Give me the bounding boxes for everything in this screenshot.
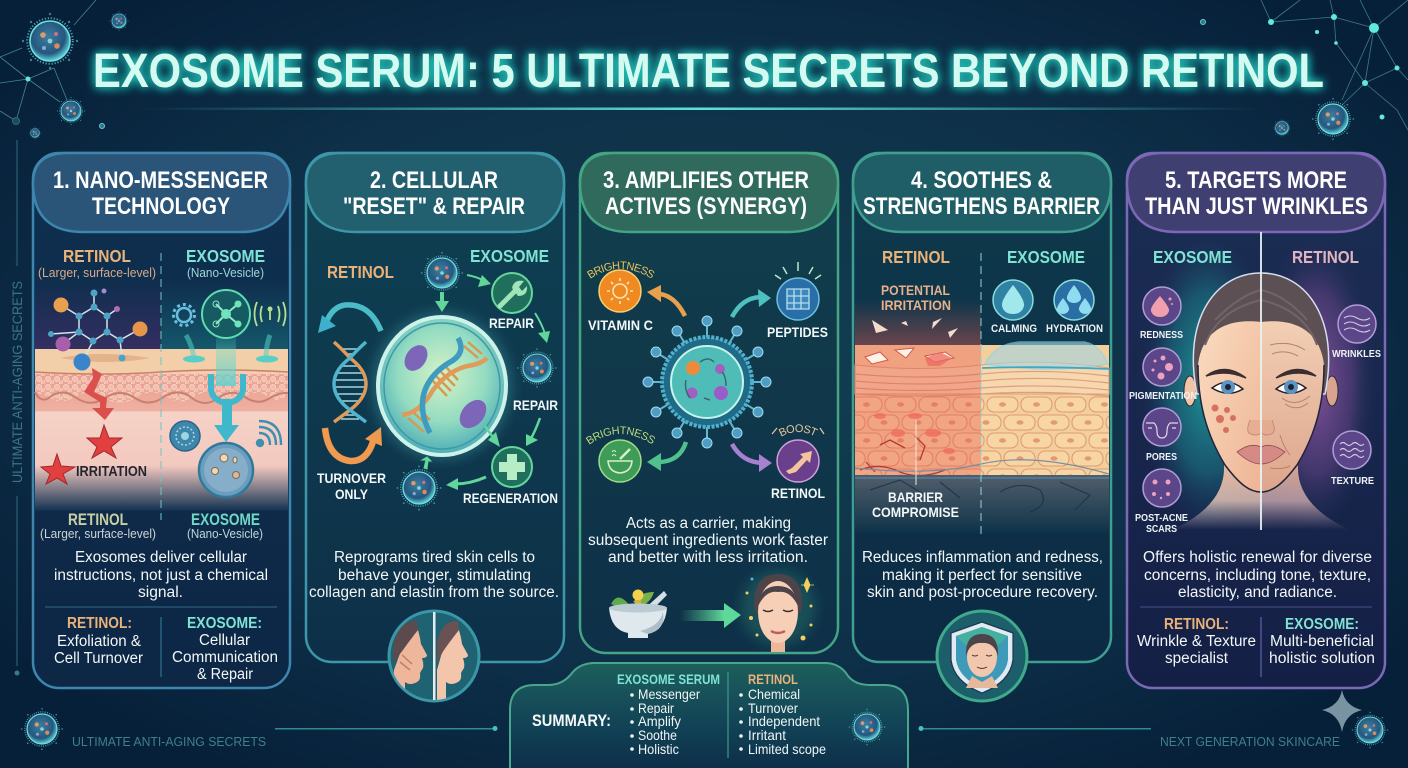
- comparison: retinol: [54, 615, 143, 667]
- label: turnover only: ONLY: [335, 486, 369, 502]
- heading 5: 5. TARGETS MORE: [1165, 167, 1347, 194]
- comparison: exosome: Communication: [172, 649, 278, 666]
- panel 3: amplifies other actives: [578, 152, 840, 654]
- label: redness: REDNESS: [1140, 329, 1183, 341]
- sub-labels: exosome: EXOSOME: [191, 511, 260, 529]
- arrow: repair flow 2: [526, 418, 540, 446]
- icon: exosome top: [421, 252, 463, 294]
- arrow: exosome delivery: [211, 338, 243, 442]
- icon: retinol boost: [772, 424, 824, 483]
- arrow: to vitamin c: [647, 285, 685, 316]
- label: retinol: RETINOL: [327, 262, 394, 282]
- description 5: elasticity, and radiance.: [1178, 584, 1337, 601]
- label: retinol: RETINOL: [1292, 247, 1359, 267]
- comparison: exosome: EXOSOME:: [1285, 616, 1359, 633]
- arrow: repair flow 1: [535, 313, 550, 343]
- column labels: retinol: (Larger, surface-level): [38, 266, 156, 280]
- description 2: [309, 549, 559, 601]
- label: barrier compromise: COMPROMISE: [872, 504, 959, 520]
- comparison: retinol: RETINOL:: [1164, 616, 1229, 633]
- description 5: concerns, including tone, texture,: [1144, 567, 1371, 584]
- list: exosome serum: Repair: [638, 700, 674, 716]
- label: repair 2: REPAIR: [513, 397, 558, 413]
- comparison: exosome: Cellular: [199, 632, 250, 649]
- comparison: retinol: Exfoliation &: [57, 633, 142, 650]
- icon: small exosome right: [1273, 119, 1291, 137]
- sub-labels: retinol: RETINOL: [68, 511, 128, 529]
- label: irritation: IRRITATION: [76, 464, 147, 480]
- comparison: exosome: Multi-beneficial: [1270, 633, 1374, 650]
- label: exosome: EXOSOME: [1153, 247, 1232, 267]
- footer right: [918, 690, 1388, 749]
- icon: large exosome: [22, 13, 78, 69]
- icon: botanical mortar: BRIGHTNESS: [586, 426, 655, 444]
- sub-labels: retinol: [40, 511, 156, 541]
- icon: retinol dna: [334, 342, 366, 422]
- network decoration: top right: [1200, 0, 1408, 140]
- icon: summary exosome: [849, 709, 885, 745]
- list: exosome serum: Amplify: [638, 713, 681, 729]
- icon: vitamin c sun: BRIGHTNESS: [587, 261, 654, 278]
- comparison: retinol: Cell Turnover: [54, 650, 143, 667]
- arrow: cell to regeneration: [485, 426, 500, 447]
- label: post-acne scars: SCARS: [1146, 523, 1177, 535]
- description 5: [1143, 549, 1372, 601]
- description 2: behave younger, stimulating: [338, 567, 531, 584]
- illustration: split face: [1172, 273, 1350, 530]
- comparison: exosome: [1269, 616, 1375, 667]
- icon: wrench repair: [492, 273, 532, 313]
- label: turnover only: TURNOVER: [317, 470, 386, 486]
- icon: pores: [1143, 408, 1181, 446]
- heading 3: 3. AMPLIFIES OTHER: [603, 167, 809, 194]
- icon: redness: [1143, 287, 1181, 325]
- list: retinol: RETINOL: [748, 671, 798, 687]
- footer left: [21, 708, 497, 750]
- description 2: Reprograms tired skin cells to: [334, 549, 535, 566]
- column labels: exosome: [186, 246, 265, 280]
- list: exosome serum: Messenger: [638, 686, 700, 702]
- footer right: NEXT GENERATION SKINCARE: [1160, 735, 1340, 749]
- heading 4: 4. SOOTHES &: [911, 167, 1052, 194]
- heading 1: 1. NANO-MESSENGER: [53, 167, 268, 194]
- sub-labels: exosome: [187, 511, 263, 541]
- comparison: exosome: & Repair: [197, 666, 253, 683]
- summary panel: [510, 663, 908, 768]
- label: exosome: EXOSOME: [470, 246, 549, 266]
- panel 4: soothes and strengthens barrier: [853, 153, 1111, 701]
- icon: small exosome top: [109, 11, 129, 31]
- description 4: Reduces inflammation and redness,: [862, 549, 1103, 566]
- description 1: signal.: [138, 584, 183, 601]
- icon: medium exosome: [57, 97, 85, 125]
- icon: botanical mortar: [586, 426, 655, 483]
- heading 5: [1127, 153, 1385, 232]
- panel 2: cellular reset and repair: [306, 153, 564, 702]
- label: calming: CALMING: [991, 323, 1037, 335]
- label: potential irritation: POTENTIAL: [881, 282, 950, 298]
- arrow: exosome back to cell: [422, 457, 431, 469]
- icon: exosome repair: [517, 348, 557, 388]
- list: retinol: [739, 671, 826, 757]
- vertical side label: [10, 140, 25, 676]
- label: summary: SUMMARY:: [532, 711, 611, 730]
- list: retinol: Limited scope: [748, 741, 826, 757]
- icon: before and after profile faces: [388, 610, 479, 702]
- label: exosome: EXOSOME: [1007, 247, 1085, 267]
- icon: exosome right: [1312, 98, 1354, 140]
- description 3: and better with less irritation.: [608, 549, 808, 566]
- arrow: retinol cycle top: [318, 305, 381, 333]
- description 2: collagen and elastin from the source.: [309, 584, 559, 601]
- icon: retinol molecule: [48, 288, 148, 370]
- divider: exosome vs retinol: [1260, 232, 1262, 530]
- icon: central exosome carrier: [643, 316, 771, 448]
- comparison: retinol: Wrinkle & Texture: [1137, 633, 1256, 650]
- list: exosome serum: Holistic: [638, 741, 679, 757]
- heading 2: "RESET" & REPAIR: [343, 193, 525, 220]
- list: retinol: Independent: [748, 713, 820, 729]
- label: post-acne scars: [1135, 512, 1188, 535]
- list: retinol: Turnover: [748, 700, 798, 716]
- label: turnover only: [317, 470, 386, 502]
- label: post-acne scars: POST-ACNE: [1135, 512, 1188, 524]
- arrow: exosome to cell: [435, 292, 449, 312]
- sub-labels: exosome: (Nano-Vesicle): [187, 527, 263, 541]
- list: retinol: Chemical: [748, 686, 800, 702]
- label: potential irritation: [881, 282, 951, 313]
- description 3: [588, 515, 828, 566]
- description 1: [54, 549, 268, 601]
- icon: central cell with dna: [372, 312, 512, 460]
- heading 2: [306, 153, 564, 232]
- icon: radiant face: [740, 570, 816, 652]
- comparison: retinol: RETINOL:: [67, 615, 132, 632]
- arrow: exosome to repair: [467, 275, 491, 287]
- icon: exosome bottom: [396, 465, 442, 511]
- icon: receptor disc: [170, 421, 200, 451]
- comparison: exosome: EXOSOME:: [187, 615, 262, 632]
- label: regeneration: REGENERATION: [463, 490, 558, 506]
- panel 1: nano-messenger technology: [33, 153, 290, 688]
- sub-labels: retinol: (Larger, surface-level): [40, 527, 156, 541]
- illustration 1: skin backdrop: [35, 280, 288, 511]
- heading 3: [580, 153, 838, 232]
- description 4: making it perfect for sensitive: [882, 567, 1082, 584]
- icon: retinol boost: BOOST: [778, 424, 818, 436]
- icon: exosome messenger signals: [174, 290, 286, 362]
- column labels: retinol: RETINOL: [63, 246, 131, 266]
- label: retinol: RETINOL: [771, 485, 825, 501]
- list: exosome serum: Soothe: [638, 727, 677, 743]
- icon: hydration drops: [1054, 280, 1094, 320]
- column labels: retinol: [38, 246, 156, 280]
- description 3: subsequent ingredients work faster: [588, 532, 828, 549]
- description 1: instructions, not just a chemical: [54, 567, 268, 584]
- label: barrier compromise: [872, 420, 959, 520]
- column labels: exosome: (Nano-Vesicle): [187, 266, 264, 280]
- heading 4: STRENGTHENS BARRIER: [863, 193, 1100, 220]
- illustration: skin cross-section: [855, 300, 1109, 533]
- comparison: exosome: holistic solution: [1269, 650, 1375, 667]
- label: texture: TEXTURE: [1331, 475, 1374, 487]
- label: vitamin c: VITAMIN C: [588, 317, 653, 333]
- icon: tiny exosome: [29, 127, 41, 139]
- title underline: [140, 108, 1260, 110]
- vertical side label: ULTIMATE ANTI-AGING SECRETS: [10, 281, 25, 483]
- heading 3: ACTIVES (SYNERGY): [605, 193, 807, 220]
- arrow: to retinol: [732, 444, 772, 472]
- description 1: Exosomes deliver cellular: [75, 549, 247, 566]
- list: exosome serum: EXOSOME SERUM: [617, 671, 720, 687]
- icon: texture: [1333, 431, 1371, 469]
- arrow: to radiant face: [680, 603, 741, 628]
- icon: wifi signal: [257, 421, 281, 446]
- heading 1: TECHNOLOGY: [92, 193, 230, 220]
- icon: calming drop: [993, 280, 1033, 320]
- comparison: retinol: specialist: [1165, 650, 1229, 667]
- label: barrier compromise: BARRIER: [888, 489, 943, 505]
- column labels: exosome: EXOSOME: [186, 246, 265, 266]
- icon: post-acne scars: [1143, 469, 1181, 507]
- icon: pigmentation: [1143, 348, 1181, 386]
- list: exosome serum: [617, 671, 720, 757]
- label: repair 1: REPAIR: [489, 315, 534, 331]
- icon: regeneration plus: [492, 447, 532, 487]
- list: retinol: Irritant: [748, 727, 786, 743]
- icon: exosome cell: [199, 443, 253, 497]
- heading 5: THAN JUST WRINKLES: [1145, 193, 1368, 220]
- label: pigmentation: PIGMENTATION: [1129, 390, 1197, 402]
- illustration: split background: [1129, 232, 1383, 532]
- heading 1: [33, 153, 290, 232]
- icon: skin flakes: [872, 318, 958, 338]
- description 4: [862, 549, 1103, 601]
- comparison: exosome: [172, 615, 278, 683]
- icon: vitamin c sun: [587, 261, 654, 313]
- icon: peptides: [775, 262, 821, 320]
- heading 4: [853, 153, 1111, 232]
- label: pores: PORES: [1146, 451, 1177, 463]
- heading 2: 2. CELLULAR: [370, 167, 498, 194]
- arrow: to botanical: [647, 442, 686, 471]
- panel 5: targets more than just wrinkles: [1127, 153, 1385, 688]
- label: retinol: RETINOL: [882, 247, 950, 267]
- description 5: Offers holistic renewal for diverse: [1143, 549, 1372, 566]
- footer left: ULTIMATE ANTI-AGING SECRETS: [72, 735, 266, 749]
- icon: mortar and pestle: [609, 590, 667, 638]
- icon: wrinkles: [1338, 305, 1376, 343]
- description 4: skin and post-procedure recovery.: [867, 584, 1098, 601]
- arrow: to peptides: [732, 289, 771, 317]
- description 3: Acts as a carrier, making: [626, 515, 791, 532]
- label: wrinkles: WRINKLES: [1332, 348, 1381, 360]
- network decoration: top left: [0, 0, 129, 139]
- arrow: retinol cycle bottom: [325, 427, 382, 461]
- label: potential irritation: IRRITATION: [881, 297, 951, 313]
- icon: irritation stars: [41, 425, 122, 484]
- comparison: retinol: [1137, 616, 1256, 667]
- arrow: irritation path: [84, 368, 114, 420]
- icon: protected face shield: [937, 611, 1027, 701]
- label: peptides: PEPTIDES: [767, 324, 828, 340]
- label: hydration: HYDRATION: [1046, 323, 1103, 335]
- arrow: regeneration to exosome: [446, 477, 486, 490]
